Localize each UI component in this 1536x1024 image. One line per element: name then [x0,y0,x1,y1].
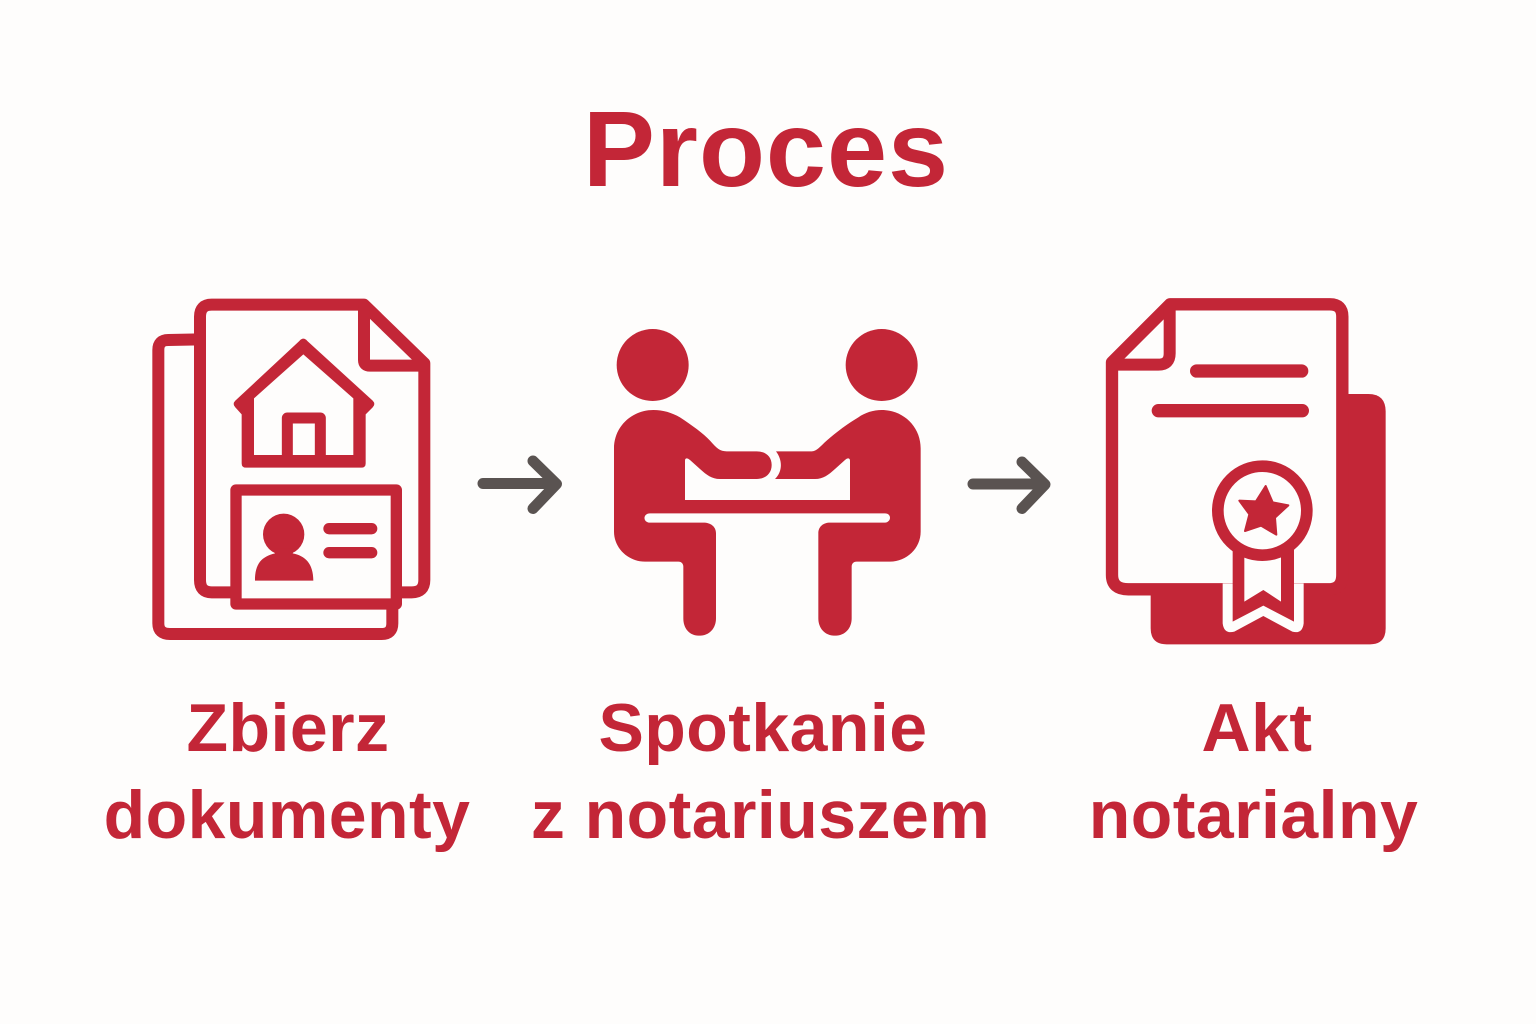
label: step 2: Spotkanie [598,690,928,766]
ribbon outline [1223,583,1304,632]
star [1239,486,1288,535]
main page with folded corner [200,305,424,592]
label: step 3: Akt [1202,690,1312,766]
ID card text lines [329,529,372,553]
right head [846,329,918,401]
ribbon [1233,545,1294,622]
arrow 1 [483,461,556,508]
page fold [1110,305,1170,365]
label: step 1: dokumenty [104,777,470,853]
icon: notarial deed with seal [1110,304,1386,644]
seal [1218,466,1307,555]
icon: documents with house and ID card [158,305,424,634]
house [234,339,374,468]
ID card portrait [255,514,313,581]
label: step 3 [1089,690,1418,853]
label: step 1 [104,690,470,853]
seated figures and table [614,410,921,636]
front page [1112,304,1342,589]
left head [617,329,689,401]
ID card [236,490,396,604]
back page [158,339,392,634]
deed text lines [1158,371,1302,411]
label: step 2 [531,690,990,853]
icon: two people meeting at a table [614,329,921,636]
arrow 2 [973,462,1045,508]
label: step 1: Zbierz [187,690,389,766]
page fold [364,308,423,366]
back sheet [1151,394,1386,644]
house door [287,418,320,457]
label: step 3: notarialny [1089,777,1418,853]
label: step 2: z notariuszem [531,777,990,853]
title: Proces [583,88,949,209]
